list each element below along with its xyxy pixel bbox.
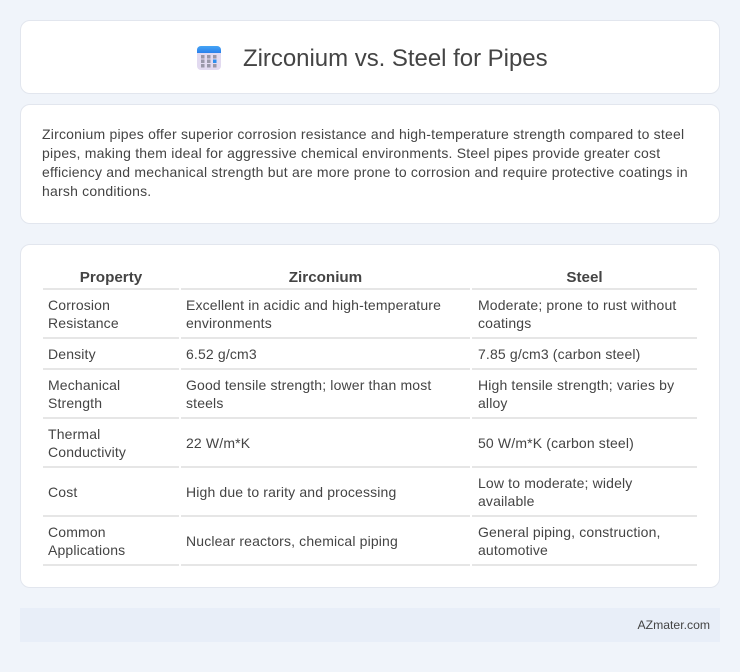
- row: Cost: Cost: [48, 484, 77, 500]
- footer bar: [20, 608, 720, 642]
- footer brand: AZmater.com: [638, 618, 710, 632]
- comparison table: coatings: [478, 315, 531, 331]
- header: Steel: Steel: [566, 269, 603, 286]
- comparison table: steels: [186, 395, 223, 411]
- header: Zirconium: Zirconium: [289, 269, 362, 286]
- row: Common Applications: [48, 524, 125, 558]
- summary text: Zirconium pipes offer superior corrosion resistance and high-temperature strength compared to steel: [42, 126, 684, 142]
- row: Mechanical Strength: Mechanical: [48, 377, 120, 393]
- row: Corrosion Resistance: Corrosion: [48, 297, 110, 313]
- comparison table: 7.85 g/cm3 (carbon steel): [478, 346, 640, 362]
- summary text: harsh conditions.: [42, 183, 151, 199]
- table card: [20, 244, 720, 588]
- summary text: pipes, making them ideal for aggressive chemical environments. Steel pipes provide greater cost: [42, 145, 660, 161]
- row: Corrosion Resistance: Resistance: [48, 315, 119, 331]
- header: Property: Property: [80, 269, 142, 286]
- title card: [20, 20, 720, 94]
- comparison table: alloy: [478, 395, 508, 411]
- comparison table: [43, 269, 697, 566]
- comparison table: 50 W/m*K (carbon steel): [478, 435, 634, 451]
- title: Zirconium vs. Steel for Pipes: [243, 45, 548, 72]
- comparison table: 22 W/m*K: [186, 435, 250, 451]
- comparison table: automotive: [478, 542, 548, 558]
- comparison table: High tensile strength; varies by: [478, 377, 674, 393]
- comparison table: 6.52 g/cm3: [186, 346, 257, 362]
- row: Corrosion Resistance: [48, 297, 119, 331]
- comparison table: Nuclear reactors, chemical piping: [186, 533, 398, 549]
- comparison table: Moderate; prone to rust without: [478, 297, 676, 313]
- comparison table: environments: [186, 315, 272, 331]
- row: Thermal Conductivity: Conductivity: [48, 444, 126, 460]
- row: Mechanical Strength: [48, 377, 120, 411]
- comparison table: available: [478, 493, 535, 509]
- row: Common Applications: Applications: [48, 542, 125, 558]
- row: Thermal Conductivity: [48, 426, 126, 460]
- comparison table: Good tensile strength; lower than most: [186, 377, 431, 393]
- summary text: [42, 126, 688, 199]
- summary text: efficiency and mechanical strength but are more prone to corrosion and require protective coatings in: [42, 164, 688, 180]
- summary card: [20, 104, 720, 224]
- icon: calendar: [197, 46, 221, 70]
- row: Density: Density: [48, 346, 96, 362]
- row: Common Applications: Common: [48, 524, 106, 540]
- comparison table: Excellent in acidic and high-temperature: [186, 297, 441, 313]
- row: Mechanical Strength: Strength: [48, 395, 102, 411]
- comparison table: High due to rarity and processing: [186, 484, 396, 500]
- row: Thermal Conductivity: Thermal: [48, 426, 100, 442]
- comparison table: Low to moderate; widely: [478, 475, 632, 491]
- comparison table: General piping, construction,: [478, 524, 661, 540]
